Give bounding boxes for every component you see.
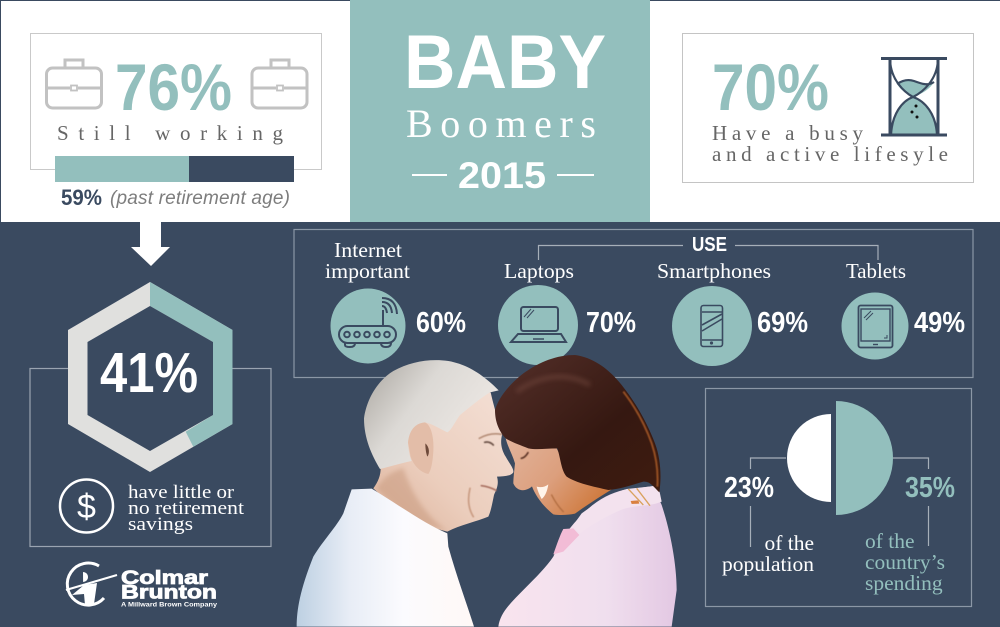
background: white upper band — [1, 1, 1000, 222]
label: laptops: Laptops — [504, 259, 574, 283]
connector: right — [893, 458, 928, 546]
text: busy and active lifestyle: Have a busy — [712, 121, 864, 145]
text: busy and active lifestyle — [712, 121, 948, 166]
bar chart: 59% past retirement age — [55, 156, 294, 182]
stat: 70% laptops: 70% — [586, 307, 636, 339]
icon: dollar: $ — [77, 488, 96, 526]
icon: right briefcase — [252, 60, 307, 108]
woman face — [506, 438, 613, 515]
label: internet important: important — [325, 259, 410, 283]
icon: router — [330, 288, 406, 364]
label: tablets: Tablets — [846, 259, 906, 283]
stat: 41%: 41% — [100, 341, 198, 405]
stat: 49%: 49% — [914, 307, 965, 339]
heading: USE with bracket: USE — [692, 234, 727, 256]
heading: 2015 with dashes: 2015 — [458, 155, 546, 196]
logo: Colmar Brunton — [66, 563, 217, 608]
icon: left briefcase — [46, 60, 102, 108]
text: of the country's spending: spending — [865, 571, 943, 595]
photo: couple touching foreheads — [297, 355, 677, 627]
text: little or no savings: no retirement — [128, 498, 245, 519]
text: of the country's spending: of the — [865, 529, 915, 553]
panel: busy lifestyle — [682, 34, 974, 182]
stat: 69%: 69% — [757, 307, 808, 339]
arrow: down to savings — [131, 222, 170, 266]
chart: split semicircles — [787, 401, 893, 515]
chart: hexagon 41% — [68, 282, 232, 472]
panel: still working — [30, 34, 322, 210]
text: still working: Still working — [57, 121, 284, 145]
label: internet important: Internet — [334, 238, 402, 262]
stat: 35%: 35% — [905, 472, 955, 504]
label: smartphones: Smartphones — [657, 259, 771, 283]
panel: title — [350, 0, 650, 222]
label: internet important — [325, 238, 410, 283]
icon: hourglass — [881, 58, 947, 135]
woman hair — [495, 355, 661, 492]
woman placket — [553, 528, 579, 554]
heading: BABY: BABY — [404, 20, 606, 105]
stat: 76%: 76% — [115, 50, 232, 124]
stat: 59% past retirement age: (past retirement age) — [110, 188, 290, 209]
heading: USE with bracket — [538, 234, 878, 260]
woman collar — [573, 486, 662, 533]
icon: smartphone — [672, 286, 752, 366]
panel: population vs spending — [706, 388, 972, 606]
icon: tablet — [842, 292, 908, 360]
woman figure — [495, 355, 677, 627]
text: little or no savings: have little or — [128, 482, 235, 503]
icon: laptop — [498, 285, 578, 365]
text: busy and active lifestyle: and active lifesyle — [712, 142, 948, 166]
text: of the country's spending: country’s — [865, 550, 945, 574]
man head — [364, 360, 513, 532]
logo: Colmar Brunton: Colmar — [121, 568, 209, 589]
panel: device use — [294, 230, 973, 378]
text: of the country's spending — [865, 529, 945, 595]
text: little or no savings: savings — [128, 514, 193, 535]
heading: Boomers: Boomers — [406, 101, 596, 146]
stat: 70%: 70% — [712, 50, 829, 124]
text: of the population: of the — [764, 531, 814, 555]
stat: 60%: 60% — [416, 307, 466, 339]
text: of the population — [722, 531, 814, 576]
woman shirt — [498, 486, 677, 627]
stat: 23%: 23% — [724, 472, 774, 504]
stat: 59% past retirement age — [61, 185, 290, 210]
logo: Colmar Brunton: Brunton — [121, 582, 217, 604]
stat: 59% past retirement age: 59% — [61, 185, 102, 210]
text: of the population: population — [722, 552, 814, 576]
connector: left — [750, 458, 786, 547]
icon: dollar — [60, 480, 113, 532]
logo: Colmar Brunton: A Millward Brown Company — [121, 602, 217, 608]
man shirt — [297, 489, 474, 627]
panel: retirement savings — [30, 282, 271, 546]
text: little or no savings — [128, 482, 245, 535]
